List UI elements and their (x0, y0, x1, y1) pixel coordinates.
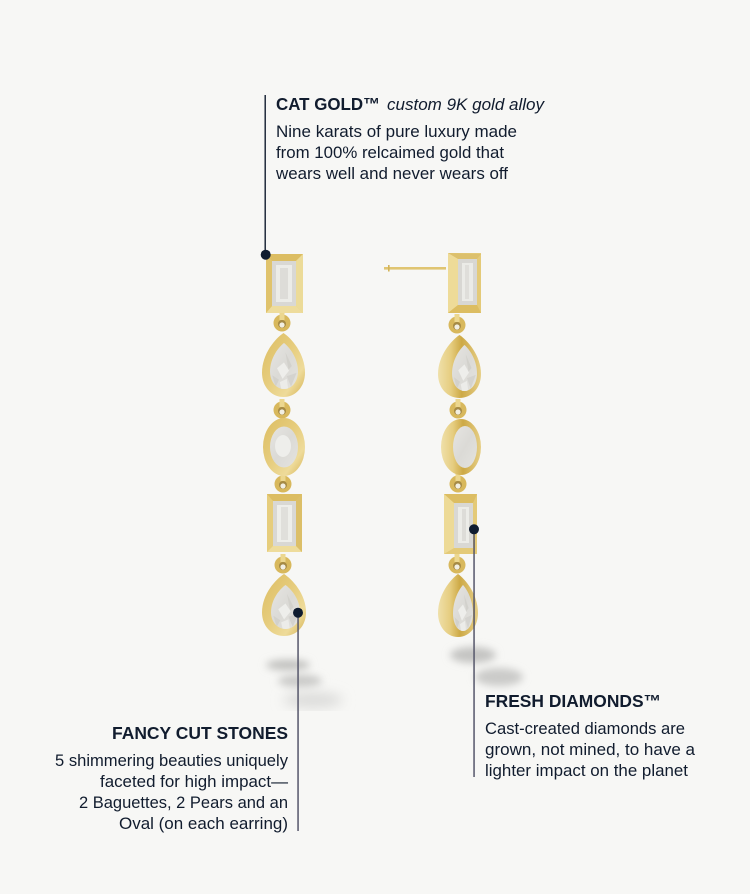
heading: FANCY CUT STONES (112, 723, 288, 743)
body: Oval (on each earring) (119, 815, 288, 833)
lower baguette (444, 494, 477, 554)
link 1 (448, 314, 466, 334)
callout: cat gold leader (261, 95, 271, 260)
body: grown, not mined, to have a (485, 741, 696, 759)
oval (263, 418, 305, 476)
text: fancy cut stones (55, 723, 293, 833)
body: Cast-created diamonds are (485, 720, 685, 738)
link 2 (274, 399, 290, 418)
link 1 (274, 312, 290, 332)
oval (441, 419, 481, 475)
link 4 (448, 554, 466, 574)
left earring shadows (266, 660, 343, 708)
body: from 100% relcaimed gold that (276, 144, 504, 162)
heading: FRESH DIAMONDS™ (485, 691, 661, 711)
link 3 (450, 473, 466, 492)
top baguette (266, 254, 303, 313)
pear 2 (262, 574, 306, 636)
body: wears well and never wears off (275, 165, 508, 183)
callout: fancy cut leader (293, 608, 303, 831)
post (384, 265, 446, 272)
pear 1 (262, 333, 305, 397)
infographic: earring anatomy (56, 95, 695, 832)
body: 5 shimmering beauties uniquely (55, 752, 289, 770)
heading: CAT GOLD™ (276, 94, 380, 114)
text: fresh diamonds (485, 691, 700, 780)
pear 1 (438, 335, 481, 398)
subheading: custom 9K gold alloy (387, 96, 546, 114)
body: 2 Baguettes, 2 Pears and an (79, 794, 288, 812)
link 4 (274, 554, 292, 574)
callout: fresh diamonds leader (469, 524, 479, 777)
body: faceted for high impact— (100, 773, 289, 791)
lower baguette (267, 494, 302, 552)
link 3 (274, 473, 292, 492)
body: lighter impact on the planet (485, 762, 688, 780)
text: cat gold (275, 94, 546, 183)
right earring shadows (450, 647, 523, 686)
left earring (262, 254, 306, 636)
link 2 (450, 399, 466, 418)
right earring (384, 253, 481, 637)
pear 2 (438, 574, 478, 637)
top baguette (448, 253, 481, 313)
body: Nine karats of pure luxury made (276, 123, 517, 141)
